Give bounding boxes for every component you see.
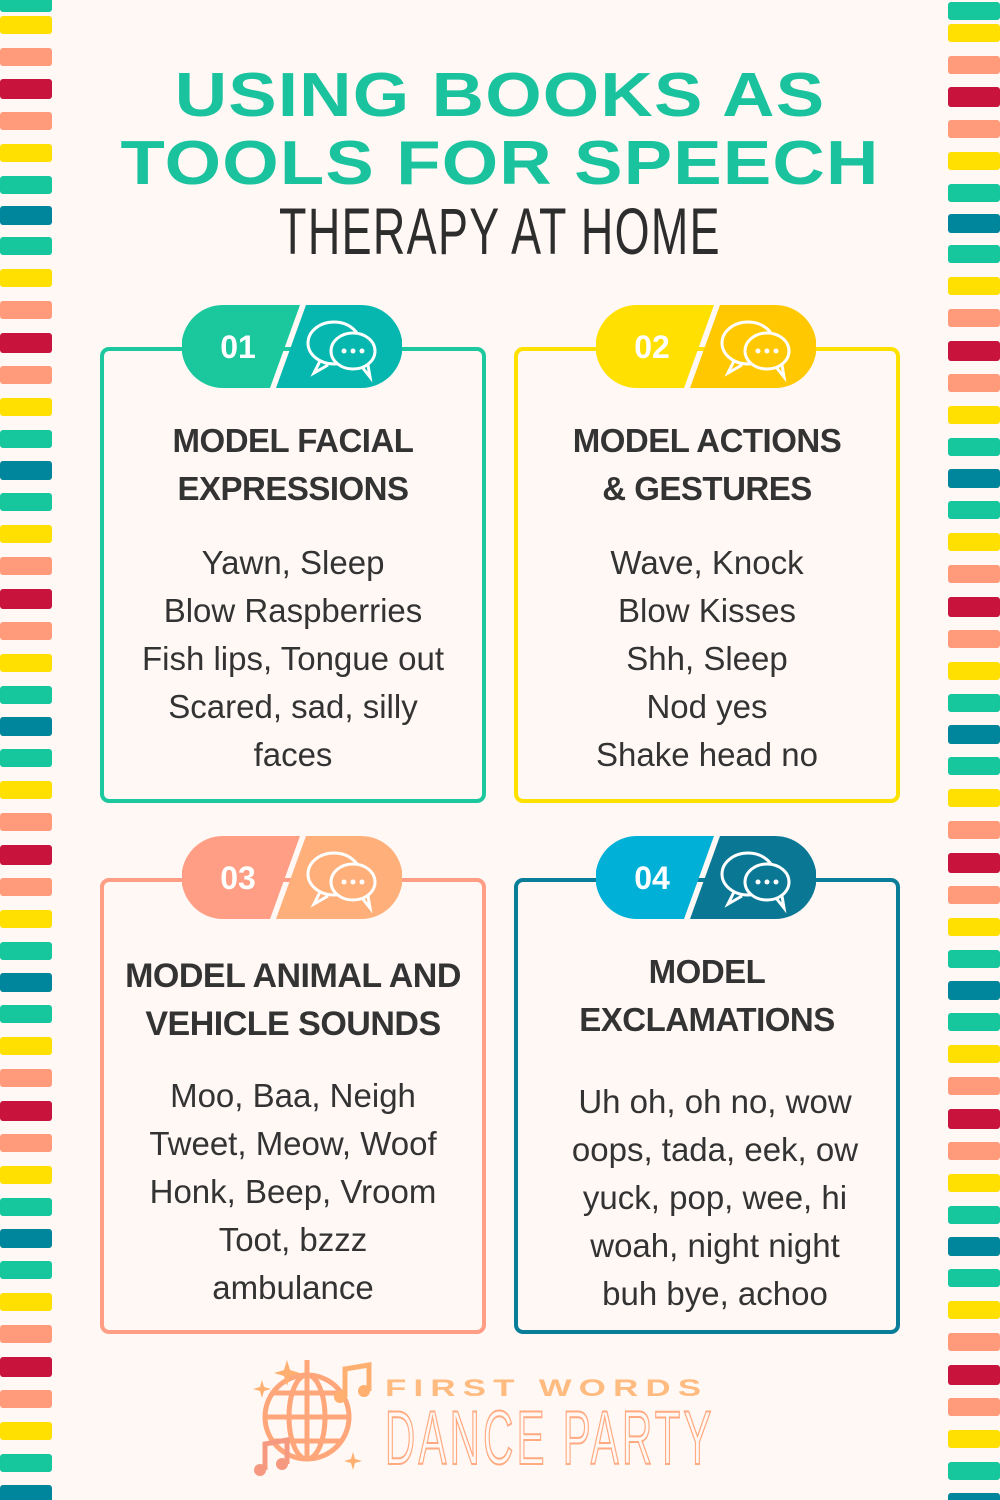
text: Nod yes	[646, 688, 768, 725]
text: woah, night night	[590, 1227, 840, 1264]
text: Scared, sad, silly	[168, 688, 418, 725]
text: Moo, Baa, Neigh	[170, 1077, 416, 1114]
text: oops, tada, eek, ow	[572, 1131, 858, 1168]
heading: & GESTURES	[602, 470, 812, 507]
text: Honk, Beep, Vroom	[150, 1173, 436, 1210]
heading: MODEL FACIAL	[173, 422, 413, 459]
panel 1: facial expressions	[100, 347, 486, 803]
text: yuck, pop, wee, hi	[583, 1179, 847, 1216]
heading: EXPRESSIONS	[177, 470, 409, 507]
badge 02	[596, 305, 816, 388]
badge 03	[182, 836, 402, 919]
heading: VEHICLE SOUNDS	[145, 1005, 441, 1043]
text	[142, 544, 444, 773]
text: Uh oh, oh no, wow	[578, 1083, 852, 1120]
heading	[579, 953, 835, 1038]
logo text: FIRST WORDS	[385, 1375, 708, 1402]
text: Shake head no	[596, 736, 818, 773]
text: Tweet, Meow, Woof	[149, 1125, 437, 1162]
text: Shh, Sleep	[626, 640, 788, 677]
title: USING BOOKS AS	[175, 61, 825, 130]
panel 3: sounds	[100, 878, 486, 1334]
heading	[125, 957, 461, 1043]
badge 02: 02	[634, 329, 670, 365]
text: faces	[254, 736, 332, 773]
heading: MODEL	[649, 953, 765, 990]
text: Blow Kisses	[618, 592, 796, 629]
text	[572, 1083, 858, 1312]
heading	[573, 422, 841, 507]
text: ambulance	[212, 1269, 374, 1306]
logo	[253, 1360, 712, 1476]
text: Fish lips, Tongue out	[142, 640, 444, 677]
panel 4: exclamations	[514, 878, 900, 1334]
text: Wave, Knock	[610, 544, 804, 581]
badge 03: 03	[220, 860, 256, 896]
heading: EXCLAMATIONS	[579, 1001, 835, 1038]
icon: disco ball	[253, 1360, 372, 1476]
title: TOOLS FOR SPEECH	[120, 129, 880, 198]
text	[149, 1077, 437, 1306]
heading: MODEL ACTIONS	[573, 422, 841, 459]
badge 01	[182, 305, 402, 388]
text: Blow Raspberries	[164, 592, 422, 629]
text: Toot, bzzz	[219, 1221, 367, 1258]
title	[120, 61, 880, 268]
text: buh bye, achoo	[602, 1275, 828, 1312]
badge 04: 04	[634, 860, 670, 896]
heading	[173, 422, 413, 507]
text: Yawn, Sleep	[202, 544, 384, 581]
text	[596, 544, 818, 773]
panel 2: actions	[514, 347, 900, 803]
badge 01: 01	[220, 329, 256, 365]
heading: MODEL ANIMAL AND	[125, 957, 461, 995]
badge 04	[596, 836, 816, 919]
title: THERAPY AT HOME	[279, 194, 721, 268]
